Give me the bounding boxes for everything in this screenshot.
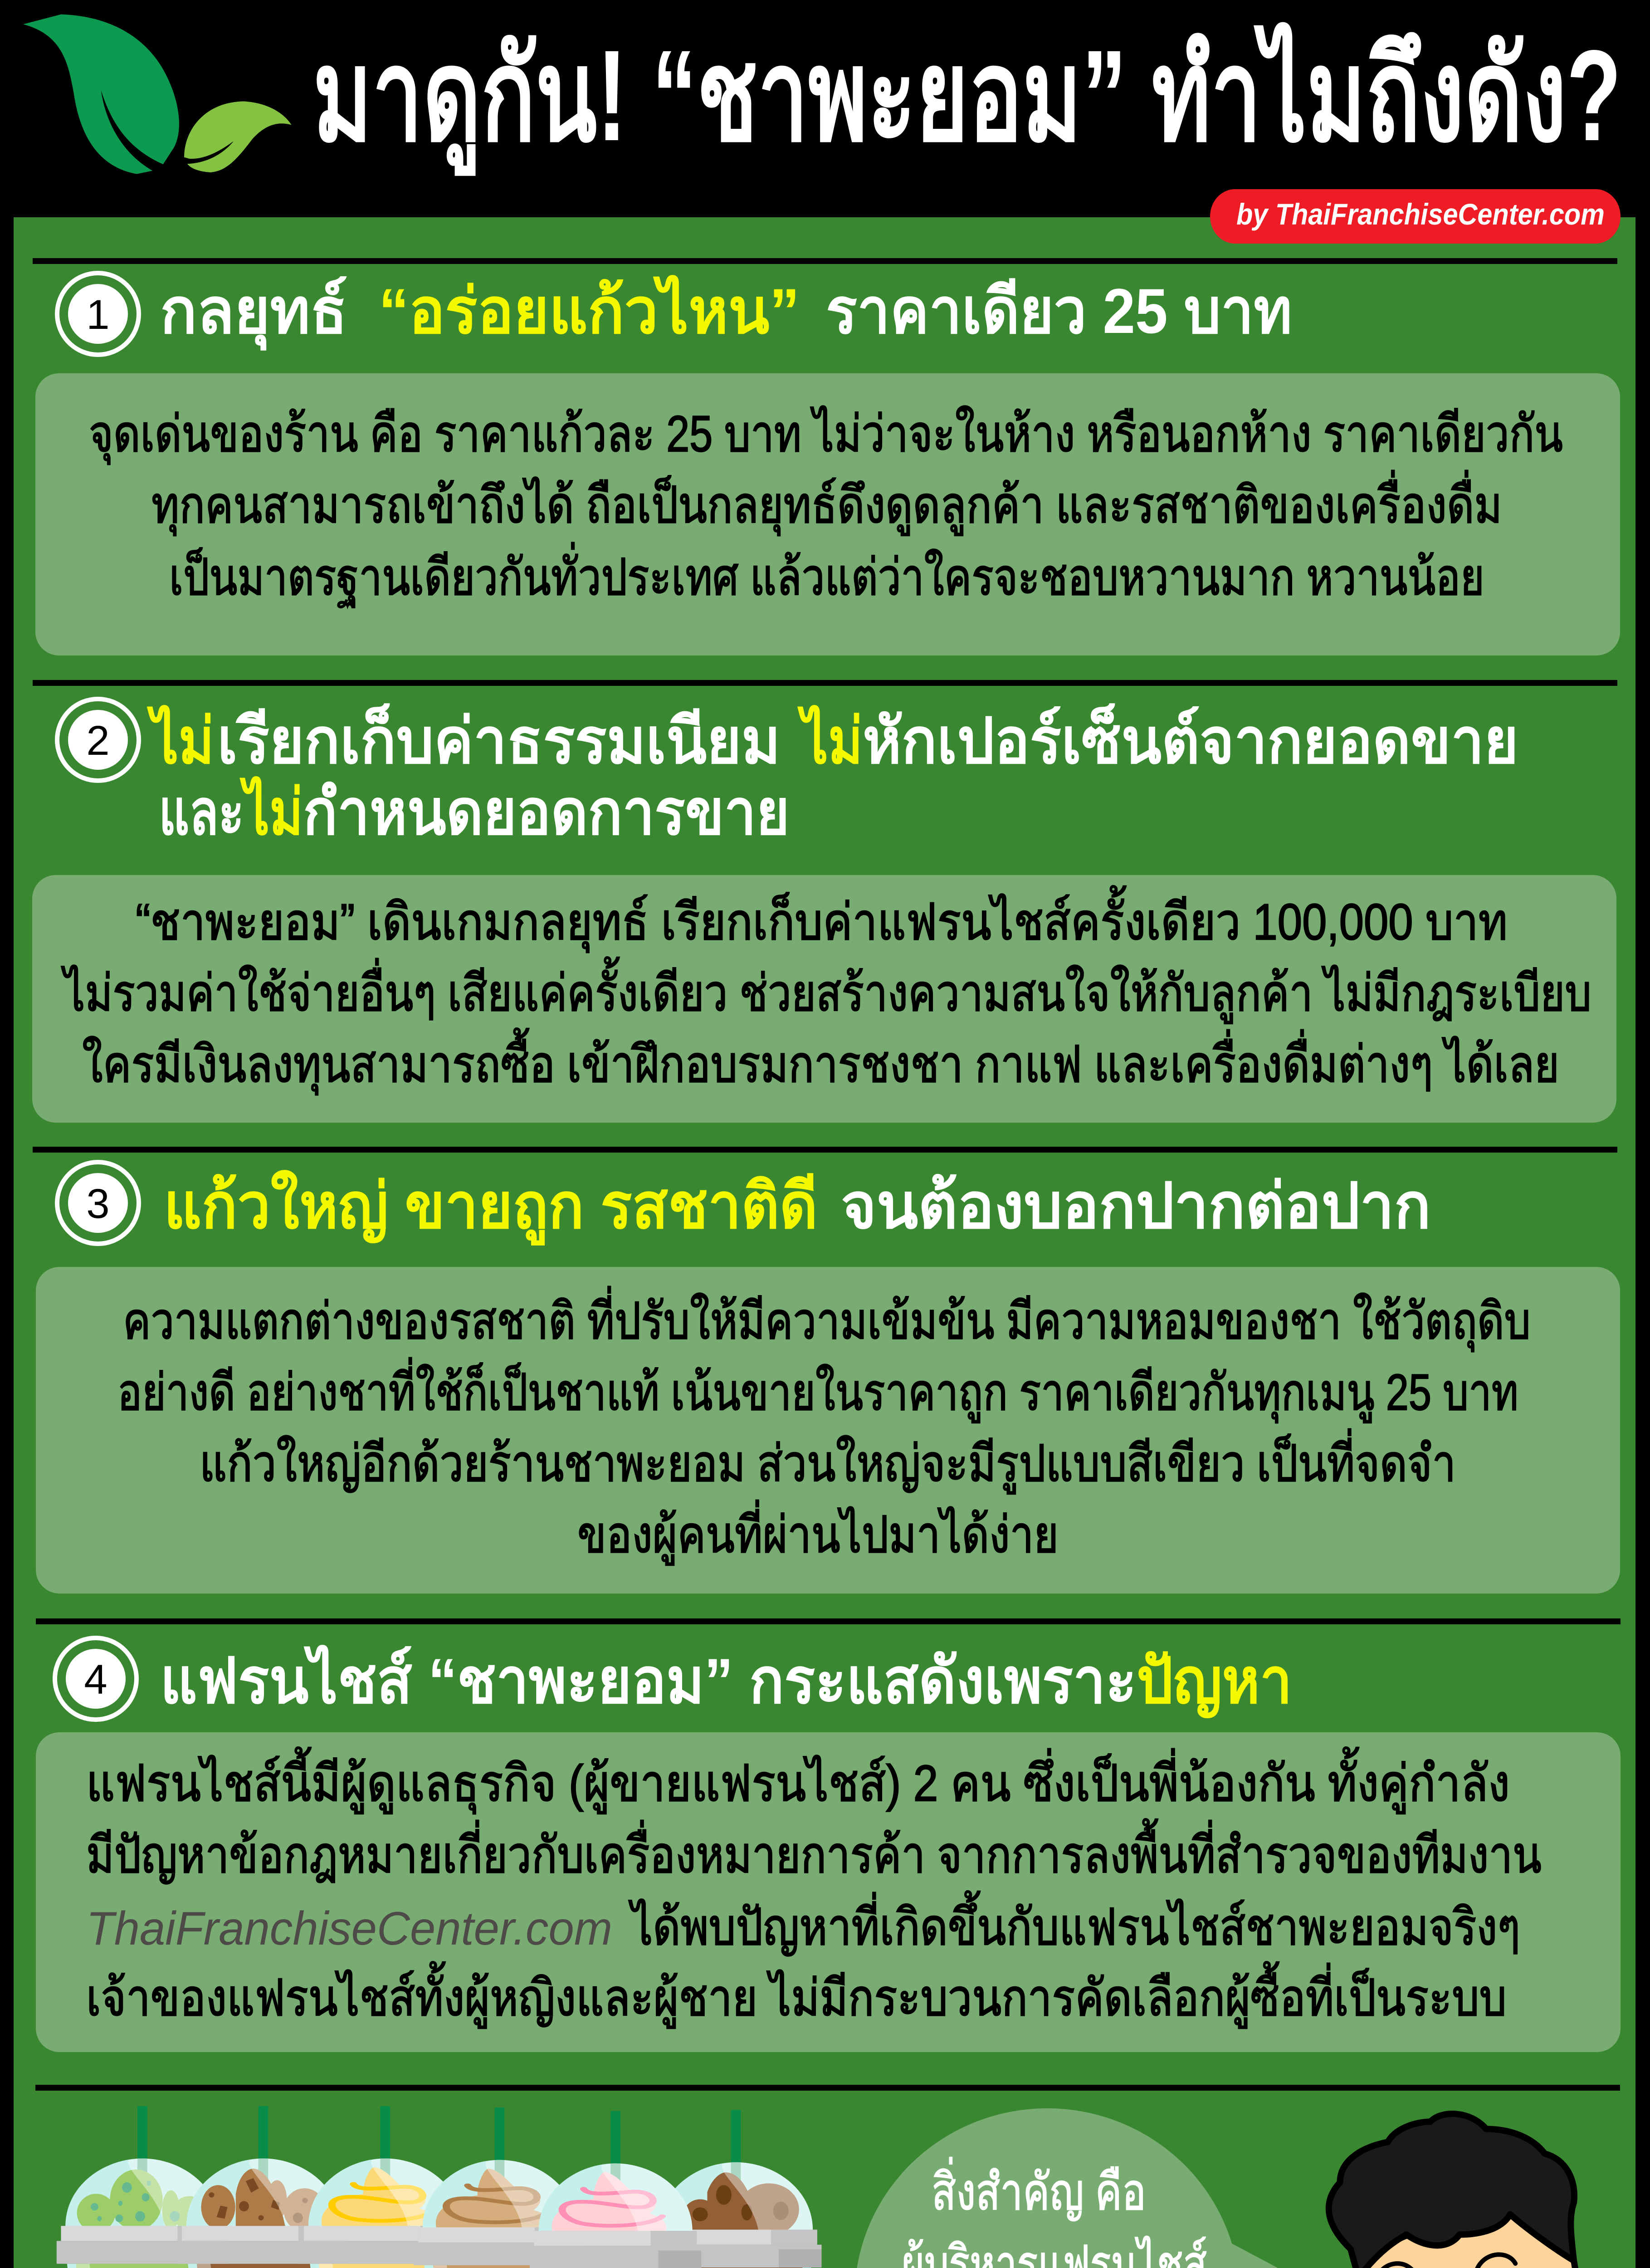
cup: mango yellow [299,2106,471,2268]
heading: section 3: แก้วใหญ่ ขายถูก รสชาติดี [164,1170,818,1246]
heading: section 1: ราคาเดียว 25 บาท [826,275,1292,347]
illustration: cartoon man thumbs up [1329,2114,1606,2268]
icon: number 4: 4 [84,1657,107,1703]
heading: section 2 [146,703,1518,848]
cup: green [57,2106,228,2268]
heading: section 1: “อร่อยแก้วไหน” [379,274,800,347]
panel: section 1 [35,273,1620,655]
text box: section 2 [32,875,1616,1123]
icon: number 3 [57,1162,139,1244]
text box: section 3: ของผู้คนที่ผ่านไปมาได้ง่าย [577,1500,1059,1565]
icon: number 1: 1 [86,292,110,338]
text box: section 1 [35,373,1620,655]
icon: number 2: 2 [86,718,110,764]
panel: section 2 [32,699,1616,1123]
cup: strawberry pink [530,2111,701,2268]
heading: section 2: หักเปอร์เซ็นต์จากยอดขาย [863,703,1518,777]
heading: section 2: ไม่ [797,704,863,777]
speech bubble [854,2108,1324,2268]
icon: number 3: 3 [86,1181,110,1227]
heading: section 2: กำหนดยอดการขาย [303,777,790,848]
text box: section 4 [36,1732,1621,2052]
heading: section 2: ไม่ [239,776,303,848]
cup: chocolate [177,2106,349,2268]
heading: section 4: แฟรนไชส์ “ชาพะยอม” กระแสดังเพราะ [160,1644,1137,1716]
panel: section 3 [36,1162,1620,1593]
text box: section 4: ThaiFranchiseCenter.com [86,1902,612,1955]
cup: caramel [414,2107,585,2268]
badge: by ThaiFranchiseCenter.com: by ThaiFranchiseCenter.com [1236,197,1605,231]
heading: section 4: ปัญหา [1137,1645,1292,1719]
panel: section 4 [36,1638,1621,2052]
icon: number 1 [57,273,139,355]
heading: section 2: ไม่ [146,704,214,777]
speech bubble: สิ่งสำคัญ คือ [932,2157,1146,2221]
heading: section 1 [160,274,1292,351]
heading: section 2: และ [159,777,244,848]
icon: leaf logo [23,15,292,174]
cup: dark coffee [650,2110,821,2268]
text box: section 3 [36,1267,1620,1593]
icon: number 2 [57,699,139,781]
heading: section 3 [164,1170,1431,1246]
icon: number 4 [55,1638,137,1720]
badge: by ThaiFranchiseCenter.com [1210,189,1621,244]
heading: section 1: กลยุทธ์ [160,275,347,351]
heading: section 3: จนต้องบอกปากต่อปาก [841,1170,1431,1242]
illustration: six iced drink cups [57,2106,821,2268]
heading: section 2: เรียกเก็บค่าธรรมเนียม [217,703,781,777]
